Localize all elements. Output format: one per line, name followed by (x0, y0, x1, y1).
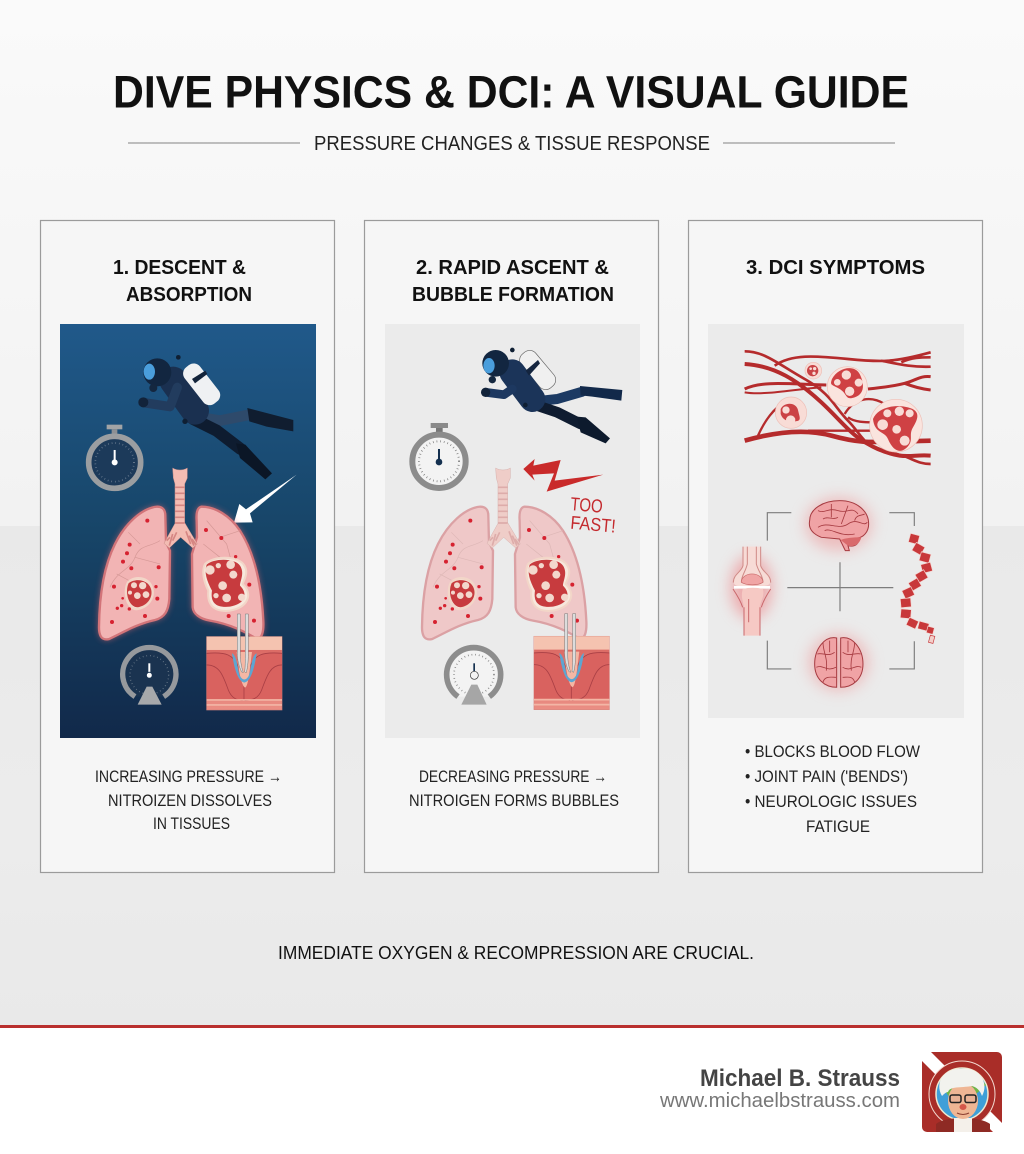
heading: panel 3: 3. DCI SYMPTOMS (746, 257, 925, 279)
callout: too fast (570, 493, 617, 537)
text: panel 3 symptoms list (745, 743, 920, 836)
icon: brain side (805, 497, 872, 551)
icon: stopwatch (412, 423, 466, 488)
icon: stopwatch (89, 425, 141, 488)
text: panel 1 caption: NITROIZEN DISSOLVES (108, 792, 272, 810)
text: panel 3 symptoms list: • NEUROLOGIC ISSUES (745, 793, 917, 811)
key message: IMMEDIATE OXYGEN & RECOMPRESSION ARE CRUCIAL. (278, 942, 754, 963)
heading: panel 2 (412, 257, 614, 306)
text: panel 1 caption: INCREASING PRESSURE → (95, 768, 282, 786)
panel: descent and absorption (40, 220, 334, 872)
icon: spine (900, 533, 935, 643)
icon: pressure gauge (447, 648, 501, 705)
callout: too fast: TOO (570, 493, 604, 517)
icon: diver (138, 355, 293, 479)
bubbles in vessels (775, 362, 922, 452)
illustration: ascent scene (385, 324, 640, 738)
heading: panel 1: ABSORPTION (126, 284, 252, 306)
icon: red zigzag arrow (523, 459, 603, 492)
illustration: symptoms (708, 324, 964, 718)
text: panel 3 symptoms list: FATIGUE (806, 818, 870, 836)
heading: panel 1: 1. DESCENT & (113, 257, 246, 279)
heading: panel 2: 2. RAPID ASCENT & (416, 257, 609, 279)
footer author: Michael B. Strauss (700, 1065, 900, 1092)
lungs (422, 468, 586, 639)
lungs (99, 468, 263, 639)
panel: rapid ascent and bubble formation (364, 220, 658, 872)
footer author (659, 1065, 900, 1112)
text: panel 2 caption: DECREASING PRESSURE → (419, 768, 607, 786)
footer author: www.michaelbstrauss.com (659, 1090, 900, 1112)
footer rule (0, 1025, 1024, 1028)
panel: DCI symptoms (688, 220, 982, 872)
heading: panel 2: BUBBLE FORMATION (412, 284, 614, 306)
text: panel 2 caption: NITROIGEN FORMS BUBBLES (409, 792, 619, 810)
heading: panel 1 (113, 257, 252, 306)
text: panel 1 caption: IN TISSUES (153, 815, 230, 833)
tissue inset (534, 614, 609, 710)
callout: too fast: FAST! (570, 512, 617, 537)
icon: white arrow (234, 475, 297, 523)
logo (922, 1052, 1002, 1132)
text: panel 3 symptoms list: • BLOCKS BLOOD FLOW (745, 743, 920, 761)
blood vessels (745, 351, 931, 464)
tissue inset (207, 614, 282, 710)
text: panel 3 symptoms list: • JOINT PAIN ('BENDS') (745, 768, 908, 786)
illustration: descent scene (60, 324, 316, 738)
subtitle with rules: PRESSURE CHANGES & TISSUE RESPONSE (314, 133, 710, 155)
icon: knee joint (731, 547, 772, 636)
icon: brain top (809, 634, 869, 691)
title: DIVE PHYSICS & DCI: A VISUAL GUIDE (113, 66, 909, 118)
text: panel 2 caption (409, 768, 619, 810)
icon: diver (481, 347, 622, 443)
icon: pressure gauge (123, 647, 176, 705)
layout brackets and cross (767, 513, 914, 669)
text: panel 1 caption (95, 768, 282, 833)
